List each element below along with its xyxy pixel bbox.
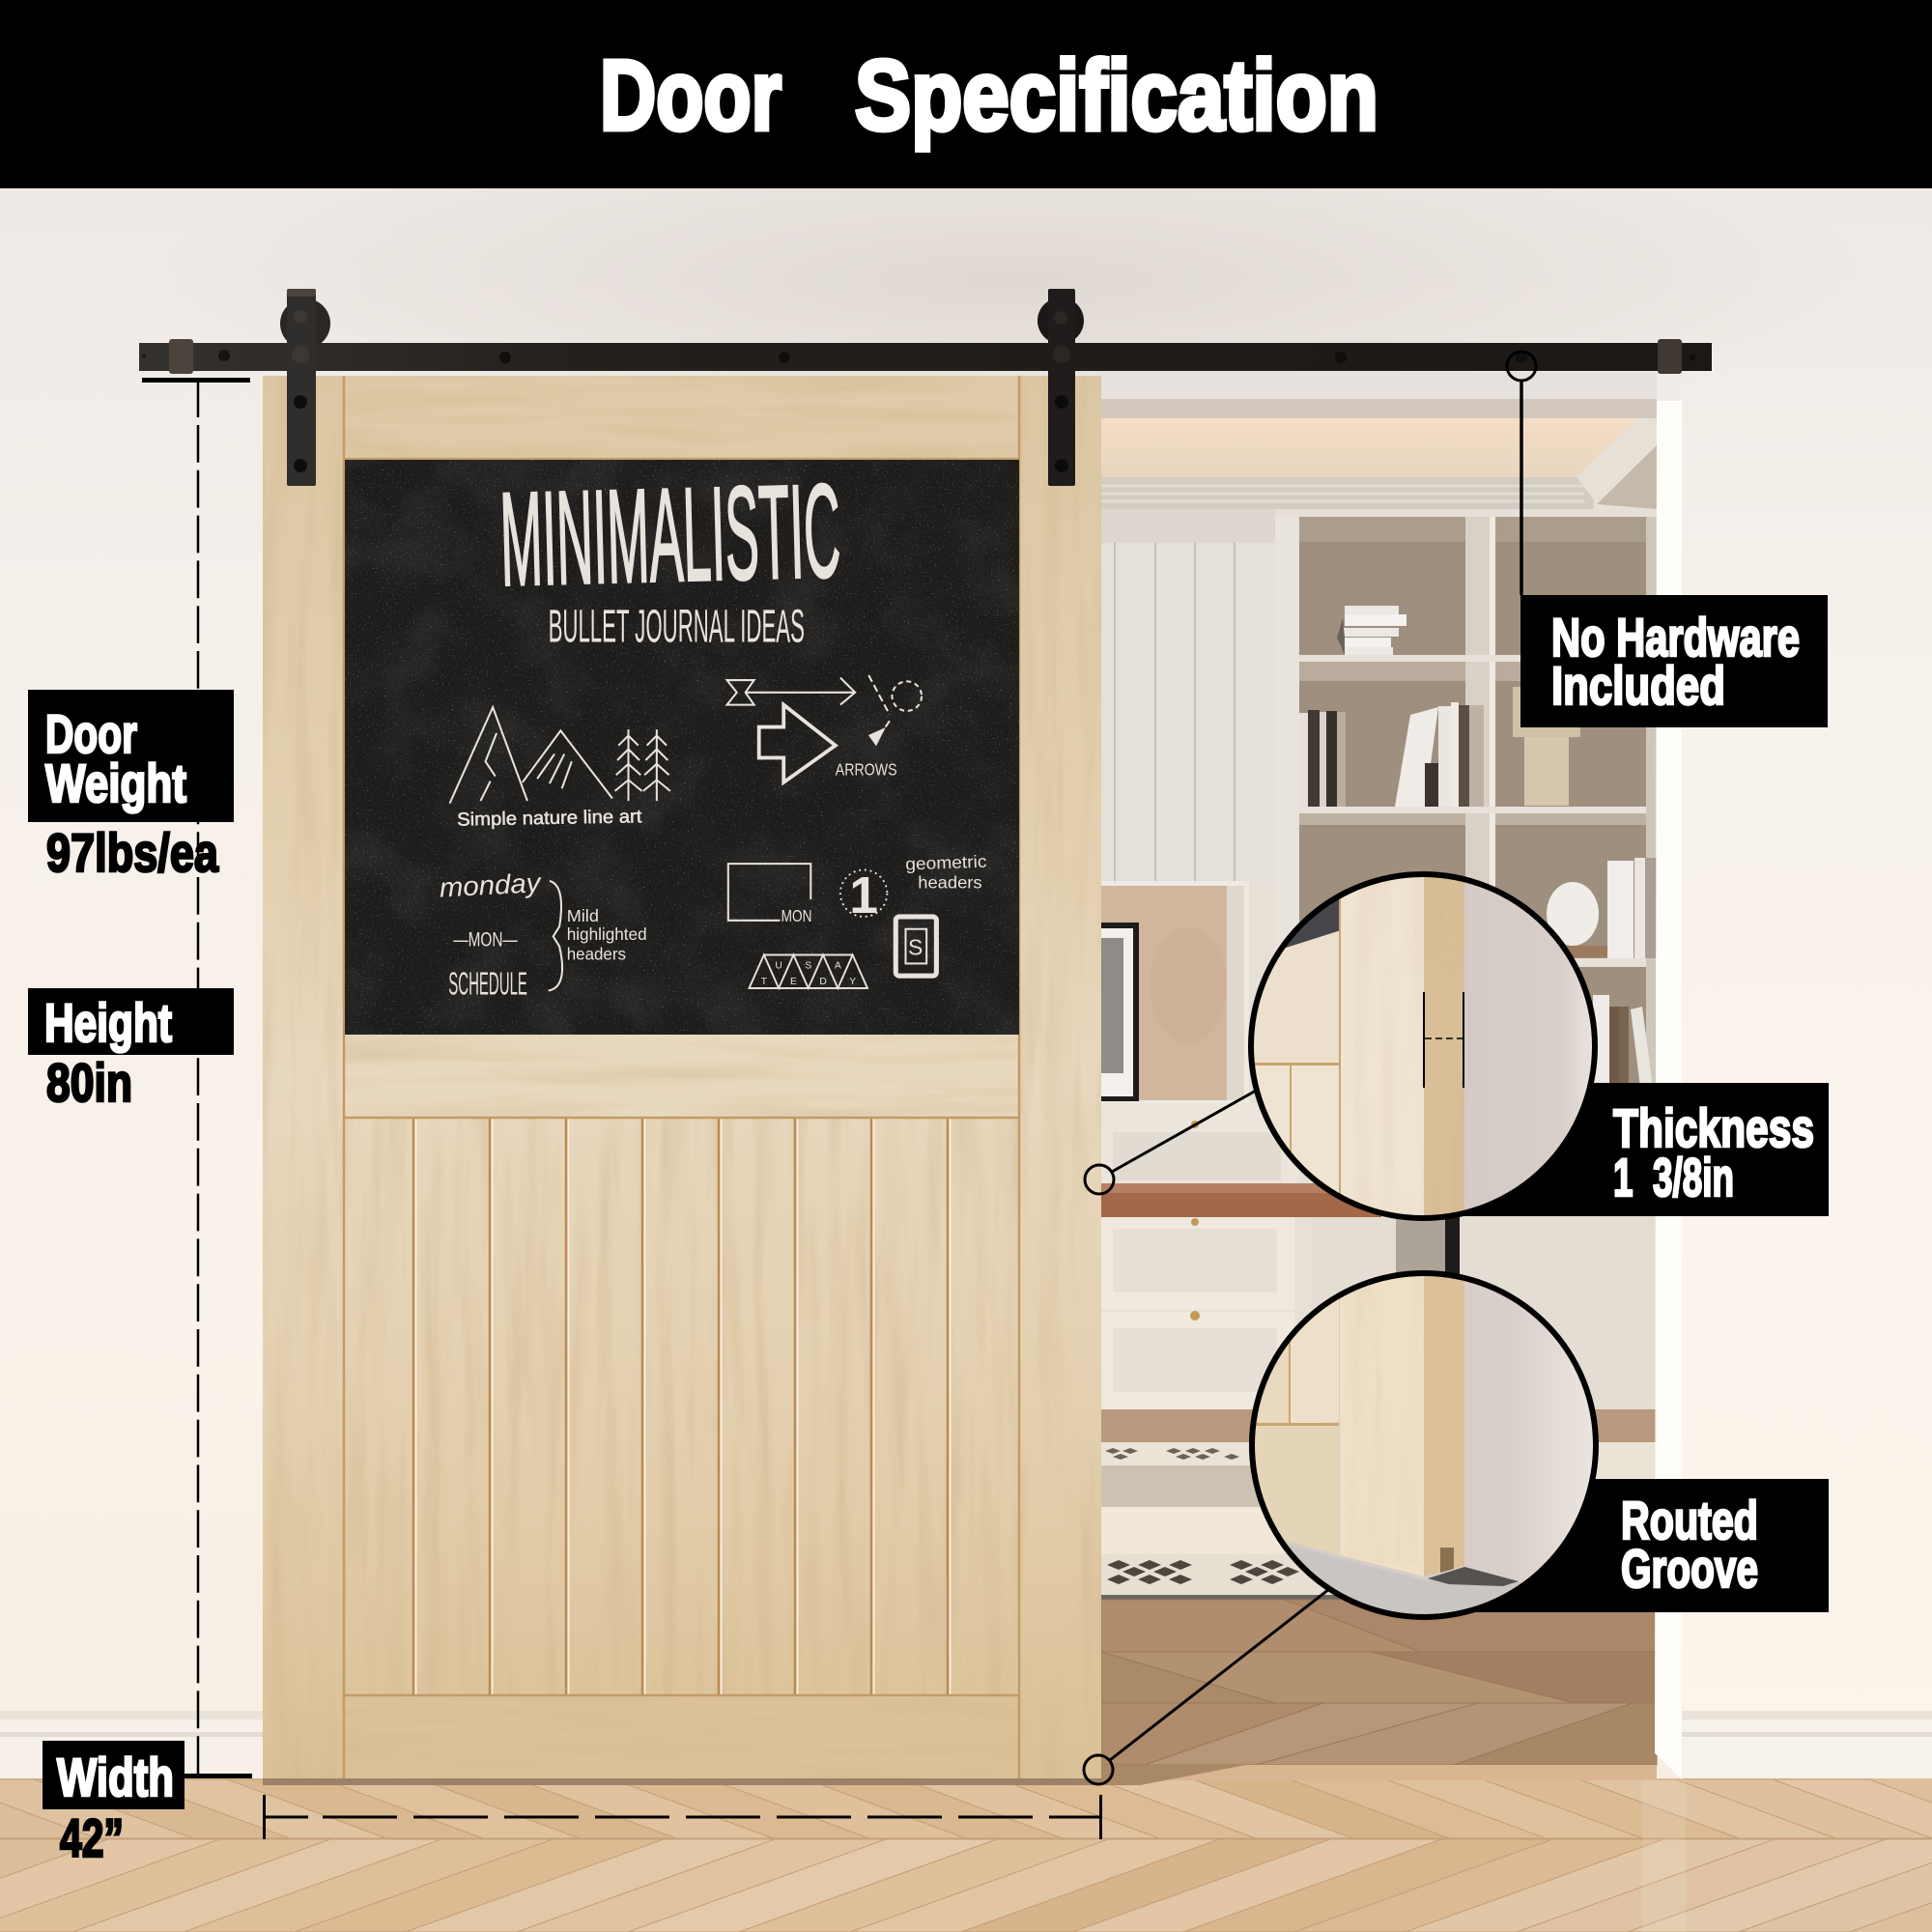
chalkboard (345, 457, 1019, 1035)
callout: no hardware included (1507, 352, 1828, 727)
magnified detail: routed groove (1252, 1273, 1596, 1617)
door rails (344, 376, 1019, 1778)
chalk caption arrows: ARROWS (836, 759, 897, 779)
label: width: 42” (60, 1807, 124, 1868)
label: height (28, 988, 234, 1113)
title: Specification (855, 40, 1378, 151)
room floor and rug (1101, 1409, 1657, 1785)
door cast shadow (263, 1778, 1103, 1785)
label: door weight: Weight (45, 753, 186, 813)
chalk mountains and trees (450, 707, 670, 804)
header bar (0, 0, 1932, 188)
cabinets and desk (1101, 1103, 1656, 1410)
ceiling soffit (1101, 372, 1657, 509)
wall paneling (1101, 509, 1275, 882)
room interior seen through doorway (1101, 372, 1657, 1785)
chalk monday lettering: highlighted (567, 924, 647, 944)
chalk monday lettering: headers (567, 945, 626, 964)
chalk arrows (727, 675, 922, 782)
chalk geometric headers: D (819, 977, 827, 987)
label: door weight: Door (45, 703, 137, 764)
chalk geometric headers: E (790, 977, 797, 987)
callout text: routed groove: Routed (1621, 1490, 1758, 1550)
title (600, 40, 1378, 151)
lower plank panel (344, 1118, 1019, 1695)
chalk geometric headers: S (805, 961, 811, 972)
callout: routed groove (1084, 1479, 1829, 1784)
callout: no hardware included: Included (1551, 655, 1725, 716)
callout text: routed groove: Groove (1621, 1538, 1758, 1599)
chalk geometric headers: geometric (905, 852, 987, 874)
label: width: Width (57, 1747, 174, 1807)
barn door (263, 376, 1103, 1785)
magnified detail: door thickness (1251, 874, 1596, 1219)
chalkboard: MINIMALISTIC (498, 457, 842, 614)
chalk geometric headers: Y (849, 977, 856, 987)
chalk monday lettering (439, 867, 647, 1002)
sliding track rail (139, 339, 1712, 374)
chalk geometric headers: T (761, 977, 767, 987)
chalk geometric headers: MON (781, 906, 812, 925)
chalk geometric headers: 1 (849, 867, 878, 924)
label: door weight: 97lbs/ea (46, 822, 219, 883)
chalk caption nature: Simple nature line art (457, 807, 642, 831)
front herringbone floor (0, 1763, 1932, 1932)
right door hanger (1037, 289, 1084, 486)
door jamb (1655, 401, 1682, 1779)
callout text: thickness (1613, 1097, 1814, 1208)
chalk geometric headers: headers (918, 873, 982, 893)
bookcase (1275, 509, 1657, 1118)
label: height: Height (44, 992, 172, 1053)
chalk monday lettering: SCHEDULE (448, 966, 527, 1002)
width dimension line (263, 1795, 1102, 1839)
height dimension line (142, 378, 252, 1778)
callout text: thickness: Thickness (1613, 1097, 1814, 1158)
chalk monday lettering: Mild (567, 906, 599, 925)
left door hanger (280, 289, 330, 486)
chalk monday lettering: monday (439, 867, 543, 903)
door stiles (263, 376, 1101, 1778)
chalk geometric headers: S (908, 935, 923, 960)
callout: no hardware included: No Hardware (1551, 607, 1800, 668)
chalk geometric headers: A (835, 961, 841, 972)
callout text: routed groove (1621, 1490, 1758, 1599)
callout: thickness (1085, 1083, 1829, 1216)
label: width (43, 1741, 185, 1868)
chalk geometric headers: U (775, 961, 782, 972)
chalk monday lettering: —MON— (453, 927, 518, 952)
chalk geometric headers (728, 852, 987, 988)
title: Door (600, 40, 781, 151)
chalkboard: BULLET JOURNAL IDEAS (549, 601, 805, 653)
thickness marks (1423, 992, 1464, 1088)
label: door weight (28, 690, 234, 883)
label: height: 80in (46, 1052, 132, 1113)
panel seams (344, 376, 1019, 1778)
artwork and picture frame (1101, 881, 1249, 1105)
callout text: thickness: 1 3/8in (1613, 1147, 1734, 1208)
books and decor (1299, 606, 1657, 1103)
